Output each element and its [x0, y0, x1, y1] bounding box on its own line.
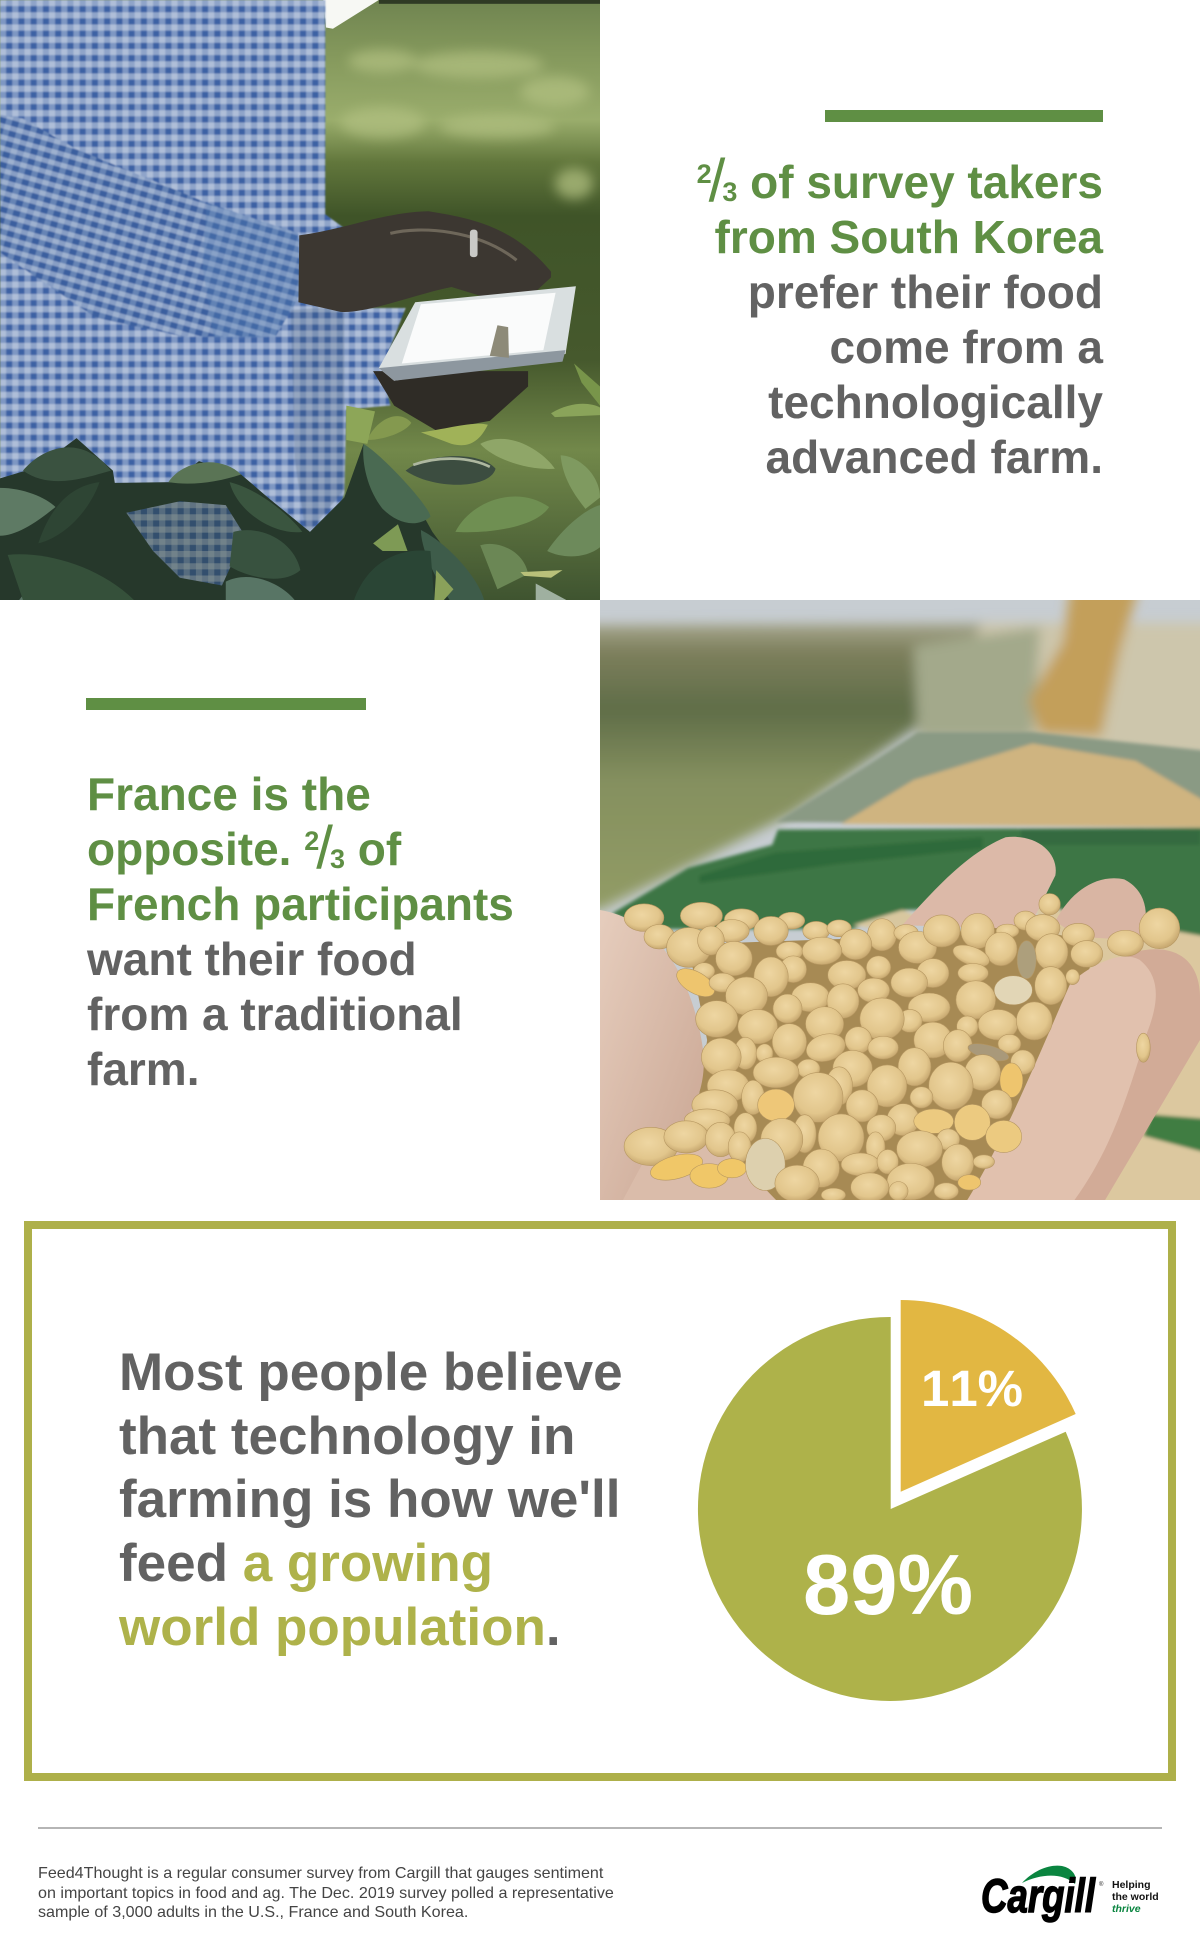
- text: France stat: French participants: [87, 878, 514, 930]
- text: South Korea stat: [697, 147, 1104, 483]
- soybeans: [624, 893, 1180, 1202]
- text: technology statement: world population.: [119, 1598, 561, 1657]
- text: South Korea stat: come from a: [829, 321, 1103, 373]
- text: South Korea stat: technologically: [768, 376, 1103, 428]
- slice: 89%: 89%: [803, 1538, 973, 1633]
- text: South Korea stat: 2/3 of survey takers: [697, 147, 1103, 214]
- text: France stat: [86, 768, 514, 1095]
- text: technology statement: feed a growing: [119, 1534, 493, 1593]
- text: technology statement: farming is how we'll: [119, 1470, 620, 1529]
- logo: Cargill: Helping: [1112, 1879, 1150, 1891]
- text: France stat: want their food: [87, 933, 417, 985]
- footer rule: [38, 1827, 1162, 1829]
- accent bar: South Korea: [825, 110, 1103, 122]
- tablet: [379, 286, 576, 381]
- hand: [298, 211, 551, 312]
- text: South Korea stat: advanced farm.: [766, 431, 1103, 483]
- hand skin: [600, 1097, 799, 1200]
- text: France stat: from a traditional: [87, 988, 463, 1040]
- logo: Cargill: [981, 1866, 1159, 1923]
- text: technology statement: Most people believe: [119, 1343, 623, 1402]
- leaves: [0, 438, 482, 600]
- text: survey note: sample of 3,000 adults in the U.S., France and South Korea.: [38, 1903, 468, 1921]
- photo: hands holding soybeans: [600, 600, 1200, 1200]
- logo: Cargill: Cargill: [981, 1870, 1096, 1922]
- accent bar: France: [86, 698, 366, 710]
- text: France stat: farm.: [87, 1043, 199, 1095]
- logo: Cargill: ®: [1099, 1881, 1104, 1888]
- text: technology statement: [118, 1343, 623, 1657]
- bean pile shadow: [688, 925, 1097, 1200]
- panel: technology in farming: [24, 1221, 1176, 1781]
- slice: 89%: [698, 1317, 1082, 1701]
- text: survey note: Feed4Thought is a regular consumer survey from Cargill that gauges sentiment: [38, 1864, 603, 1882]
- text: technology statement: that technology in: [119, 1407, 575, 1466]
- slice: 11%: 11%: [921, 1360, 1023, 1417]
- text: survey note: on important topics in food and ag. The Dec. 2019 survey polled a representative: [38, 1884, 614, 1902]
- shirt: [0, 0, 406, 600]
- text: South Korea stat: from South Korea: [715, 211, 1103, 263]
- text: France stat: opposite. 2/3 of: [87, 814, 401, 881]
- slice: 11%: [901, 1300, 1076, 1492]
- logo: Cargill: thrive: [1112, 1903, 1141, 1915]
- text: France stat: France is the: [87, 768, 371, 820]
- pie chart: 89% and 11%: [698, 1300, 1082, 1701]
- photo: farmer using tablet in soybean field: [0, 0, 600, 600]
- text: survey note: [38, 1864, 614, 1921]
- text: South Korea stat: prefer their food: [748, 266, 1103, 318]
- logo: Cargill: the world: [1112, 1891, 1159, 1903]
